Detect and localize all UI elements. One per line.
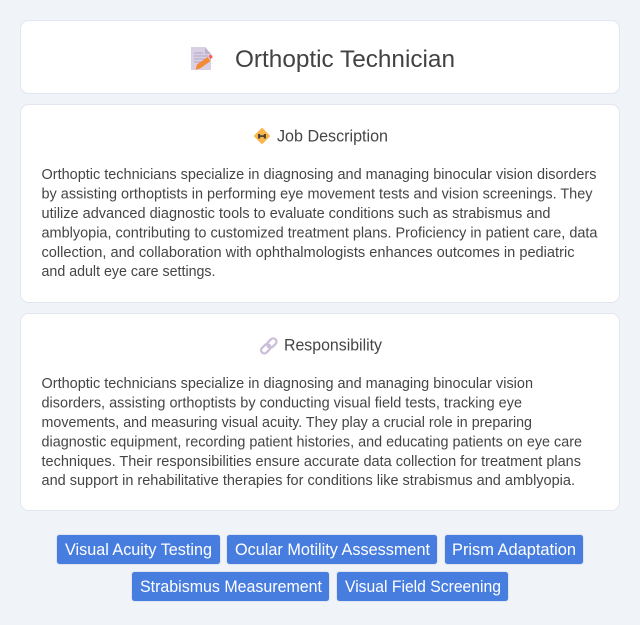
panel: job description [20,104,620,302]
text block: responsibility: techniques. Their responsibilities ensure accurate data collection for treatment plans [42,454,581,470]
text block: job description: utilize advanced diagnostic tools to evaluate conditions such as strabismus and [42,206,550,222]
text block: job description: amblyopia, contributing to customized treatment plans. Proficiency in patient care, data [42,226,598,242]
text block: responsibility: movements, and measuring visual acuity. They play a crucial role in preparing [42,415,532,431]
icon: document with pencil [191,47,213,70]
text block: job description: and adult eye care settings. [42,264,216,280]
panel: responsibility [20,314,620,510]
tag: visual acuity testing [56,534,220,564]
tag: ocular motility assessment [226,534,438,564]
heading: job description: Job Description [277,126,388,146]
tag: prism adaptation [444,534,584,564]
tag: strabismus measurement: Strabismus Measurement [140,577,322,596]
panel: title header [20,20,620,94]
text block: job description: Orthoptic technicians specialize in diagnosing and managing binocular vision disorders [42,167,596,183]
text block: responsibility: and support in rehabilitative therapies for conditions like strabismus and amblyopia. [42,473,575,489]
text block: responsibility: Orthoptic technicians specialize in diagnosing and managing binocular vision [42,376,533,392]
text block: responsibility: diagnostic equipment, recording patient histories, and educating patients on eye care [42,434,582,450]
text block: job description: by assisting orthoptists in performing eye movement tests and vision screenings. They [42,186,593,202]
text block: job description [42,167,598,280]
tag: strabismus measurement [132,572,330,602]
tag: visual field screening [336,572,508,602]
heading: responsibility: Responsibility [284,336,383,354]
title: Orthoptic Technician [235,46,455,73]
skill tags [56,534,584,602]
tag: ocular motility assessment: Ocular Motility Assessment [235,540,430,559]
tag: visual field screening: Visual Field Screening [345,577,501,596]
text block: job description: collection, and collaboration with ophthalmologists enhances outcomes in pediatric [42,245,574,261]
icon: construction diamond [254,128,270,144]
text block: responsibility: disorders, assisting orthoptists by conducting visual field tests, tracking eye [42,396,522,412]
tag: prism adaptation: Prism Adaptation [452,540,576,559]
icon: chain link [260,337,278,355]
text block: responsibility [42,376,582,489]
tag: visual acuity testing: Visual Acuity Testing [65,540,212,559]
